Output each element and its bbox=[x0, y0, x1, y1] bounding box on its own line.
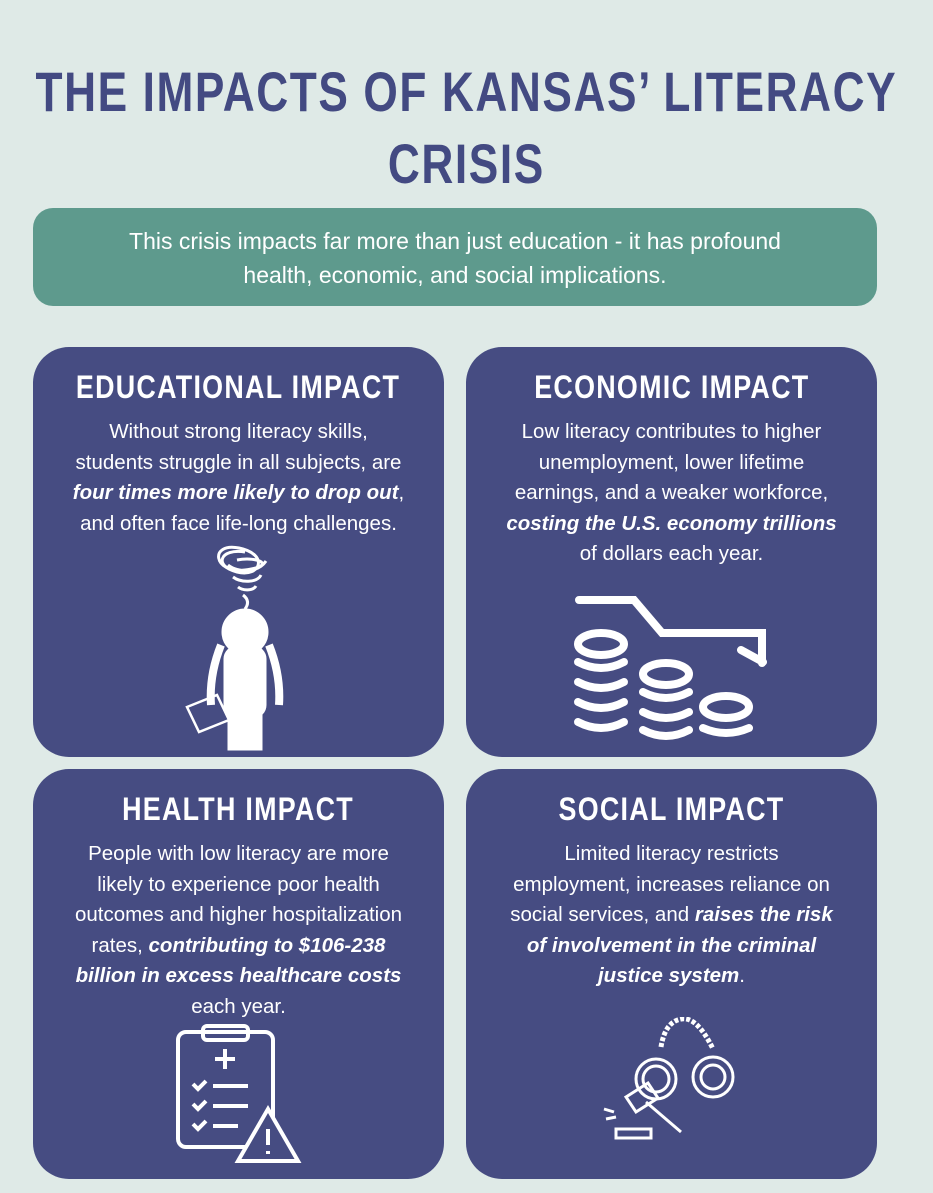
icon: coins with down arrow bbox=[574, 596, 767, 740]
text: social: Limited literacy restricts bbox=[564, 842, 779, 865]
text: economic bbox=[506, 420, 837, 565]
panel: health bbox=[33, 769, 444, 1179]
title: CRISIS bbox=[388, 132, 545, 195]
text: social bbox=[510, 842, 834, 987]
panel: social bbox=[466, 769, 877, 1179]
text: health: rates, contributing to $106-238 bbox=[92, 934, 385, 956]
intro banner: This crisis impacts far more than just education - it has profound bbox=[129, 228, 781, 254]
text: economic: Low literacy contributes to higher bbox=[522, 420, 821, 443]
text: economic: unemployment, lower lifetime bbox=[539, 450, 804, 474]
text: social: social services, and raises the risk bbox=[510, 903, 833, 926]
text: health: People with low literacy are more bbox=[88, 842, 389, 865]
text: educational: Without strong literacy skills, bbox=[109, 420, 368, 443]
icon: student bbox=[185, 546, 284, 750]
text: educational bbox=[73, 420, 404, 534]
text: economic: costing the U.S. economy trillions bbox=[506, 512, 837, 534]
icon: handcuffs and gavel bbox=[604, 1017, 734, 1140]
text: economic: of dollars each year. bbox=[580, 542, 763, 565]
text: educational: four times more likely to drop out, bbox=[73, 481, 404, 504]
text: health: likely to experience poor health bbox=[97, 872, 380, 896]
panel: educational bbox=[33, 347, 444, 757]
text: economic: earnings, and a weaker workforce, bbox=[515, 481, 828, 504]
intro banner bbox=[33, 208, 877, 306]
heading: health: HEALTH IMPACT bbox=[123, 791, 354, 827]
panel: economic bbox=[466, 347, 877, 757]
heading: educational: EDUCATIONAL IMPACT bbox=[76, 369, 401, 405]
title bbox=[36, 60, 897, 195]
text: health: outcomes and higher hospitalization bbox=[75, 903, 402, 926]
heading: economic: ECONOMIC IMPACT bbox=[534, 369, 809, 405]
icon: clipboard warning bbox=[176, 1024, 302, 1163]
title: THE IMPACTS OF KANSAS’ LITERACY bbox=[36, 60, 897, 123]
text: educational: students struggle in all subjects, are bbox=[76, 450, 401, 474]
text: health bbox=[75, 842, 402, 1018]
text: social: employment, increases reliance on bbox=[513, 872, 830, 896]
heading: social: SOCIAL IMPACT bbox=[559, 791, 784, 827]
intro banner: health, economic, and social implications. bbox=[243, 262, 667, 288]
text: social: of involvement in the criminal bbox=[527, 934, 816, 956]
text: educational: and often face life-long challenges. bbox=[80, 512, 397, 534]
text: health: billion in excess healthcare costs bbox=[76, 964, 401, 987]
text: social: justice system. bbox=[598, 964, 745, 987]
text: health: each year. bbox=[191, 994, 286, 1018]
